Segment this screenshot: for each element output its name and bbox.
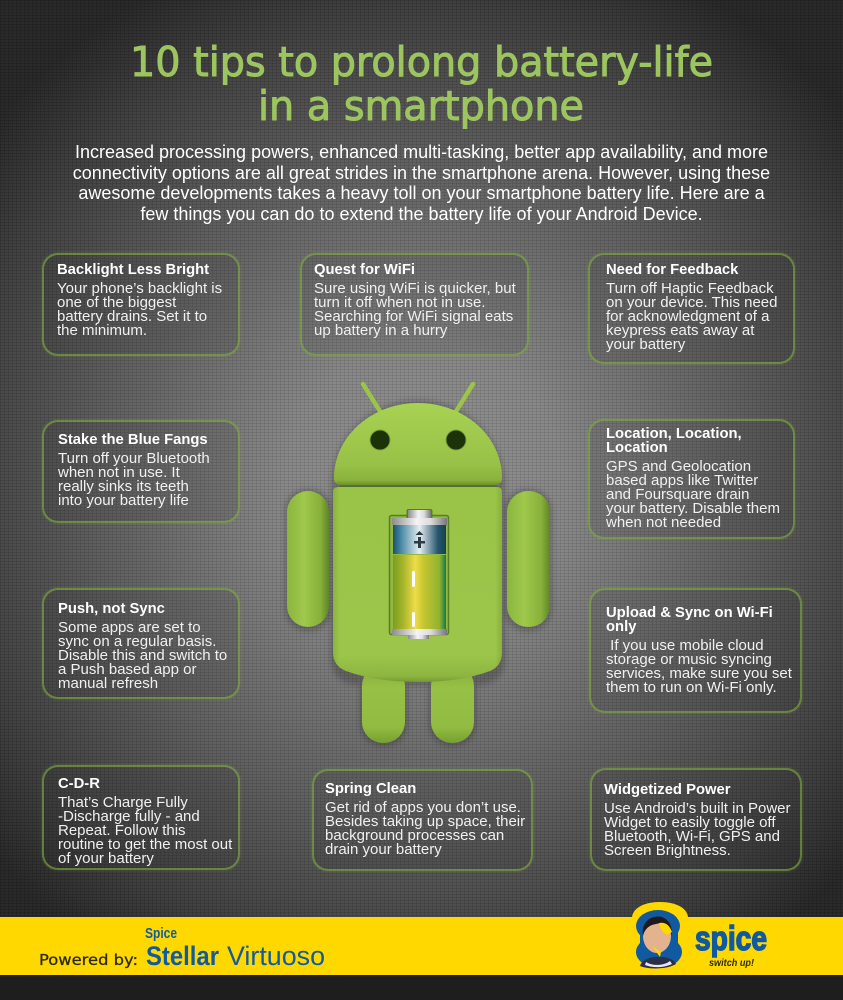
text: feedback: keypress eats away at: [606, 322, 754, 339]
heading: upload: only: [606, 619, 636, 635]
text: feedback: for acknowledgment of a: [606, 308, 769, 325]
battery: [390, 509, 448, 639]
heading: location: Location: [606, 440, 668, 456]
text: bluetooth: Turn off your Bluetooth: [58, 450, 210, 467]
text: widget: Screen Brightness.: [604, 842, 731, 859]
torso: [333, 487, 502, 682]
text: push: Some apps are set to: [58, 619, 201, 636]
text: wifi: [314, 280, 516, 339]
heading: bluetooth: Stake the Blue Fangs: [58, 432, 208, 448]
text: widget: [604, 800, 790, 859]
text: location: GPS and Geolocation: [606, 458, 751, 475]
heading: upload: [606, 605, 773, 635]
panel: location tip: [588, 419, 795, 539]
panel: upload tip: [589, 588, 802, 713]
text: backlight: the minimum.: [57, 322, 147, 339]
arms: [287, 491, 550, 627]
text: charge: Repeat. Follow this: [58, 822, 186, 839]
text: wifi: Sure using WiFi is quicker, but: [314, 280, 516, 297]
spice logo text: spice: [695, 920, 767, 958]
text: feedback: [606, 280, 778, 353]
panel: push tip: [42, 588, 240, 699]
text: backlight: Your phone’s backlight is: [57, 280, 222, 297]
legs: [362, 665, 474, 743]
panel: widget tip: [590, 768, 802, 871]
title: [130, 38, 713, 130]
panel: charge tip: [42, 765, 240, 870]
heading: push: Push, not Sync: [58, 601, 165, 617]
heading: spring clean: Spring Clean: [325, 781, 416, 797]
text: spring clean: Besides taking up space, their: [325, 813, 525, 830]
android robot illustration: [285, 384, 552, 746]
heading: location: Location, Location,: [606, 426, 742, 442]
text: widget: Widget to easily toggle off: [604, 814, 776, 831]
title: in a smartphone: [258, 82, 584, 130]
text: spring clean: drain your battery: [325, 841, 442, 858]
text: spring clean: [325, 799, 525, 858]
text: wifi: up battery in a hurry: [314, 322, 447, 339]
text: charge: -Discharge fully - and: [58, 808, 200, 825]
text: location: based apps like Twitter: [606, 472, 758, 489]
text: location: when not needed: [606, 514, 721, 531]
text: push: Disable this and switch to: [58, 647, 227, 664]
text: upload: [606, 637, 792, 696]
text: location: [606, 458, 780, 531]
text: widget: Bluetooth, Wi-Fi, GPS and: [604, 828, 780, 845]
heading: feedback: Need for Feedback: [606, 262, 738, 278]
text: charge: [58, 794, 232, 867]
text: wifi: turn it off when not in use.: [314, 294, 486, 311]
text: push: sync on a regular basis.: [58, 633, 216, 650]
title: 10 tips to prolong battery-life: [130, 38, 713, 86]
footer band: [0, 902, 843, 1000]
text: bluetooth: really sinks its teeth: [58, 478, 189, 495]
text: bluetooth: into your battery life: [58, 492, 189, 509]
text: charge: of your battery: [58, 850, 154, 867]
text: spring clean: background processes can: [325, 827, 504, 844]
text: backlight: [57, 280, 222, 339]
text: feedback: your battery: [606, 336, 685, 353]
intro paragraph: few things you can do to extend the battery life of your Android Device.: [140, 204, 703, 224]
text: spring clean: Get rid of apps you don’t use.: [325, 799, 521, 816]
heading: backlight: Backlight Less Bright: [57, 262, 209, 278]
panel: feedback tip: [588, 253, 795, 364]
intro paragraph: Increased processing powers, enhanced multi-tasking, better app availability, and more: [75, 142, 768, 162]
heading: charge: C-D-R: [58, 776, 100, 792]
panel: wifi tip: [300, 253, 529, 356]
text: push: manual refresh: [58, 675, 158, 692]
text: charge: routine to get the most out: [58, 836, 232, 853]
head: [334, 403, 502, 485]
text: feedback: Turn off Haptic Feedback: [606, 280, 774, 297]
text: backlight: battery drains. Set it to: [57, 308, 207, 325]
heading: location: [606, 426, 742, 456]
text: location: your battery. Disable them: [606, 500, 780, 517]
text: bluetooth: when not in use. It: [58, 464, 180, 481]
text: wifi: Searching for WiFi signal eats: [314, 308, 513, 325]
heading: upload: Upload & Sync on Wi-Fi: [606, 605, 773, 621]
text: location: and Foursquare drain: [606, 486, 749, 503]
text: widget: Use Android’s built in Power: [604, 800, 790, 817]
heading: widget: Widgetized Power: [604, 782, 730, 798]
text: upload: storage or music syncing: [606, 651, 772, 668]
product name virtuoso: Virtuoso: [227, 941, 325, 971]
text: backlight: one of the biggest: [57, 294, 176, 311]
text: upload: If you use mobile cloud: [610, 637, 764, 654]
text: feedback: on your device. This need: [606, 294, 778, 311]
heading: wifi: Quest for WiFi: [314, 262, 415, 278]
text: upload: them to run on Wi-Fi only.: [606, 679, 777, 696]
text: charge: That’s Charge Fully: [58, 794, 188, 811]
spice logo mark: [632, 902, 688, 968]
powered by label: Powered by:: [39, 951, 138, 969]
intro paragraph: connectivity options are all great strides in the smartphone arena. However, using these: [73, 162, 770, 182]
intro paragraph: awesome developments takes a heavy toll on your smartphone battery life. Here are a: [78, 183, 765, 203]
panel: bluetooth tip: [42, 420, 240, 523]
antennas: [363, 384, 473, 413]
text: push: a Push based app or: [58, 661, 196, 678]
tagline: switch up!: [709, 957, 754, 969]
intro paragraph: [73, 142, 770, 224]
product name stellar: Stellar: [146, 941, 219, 971]
text: bluetooth: [58, 450, 210, 509]
panel: backlight tip: [42, 253, 240, 356]
product name small: Spice: [145, 925, 177, 942]
text: push: [58, 619, 227, 692]
eyes: [370, 430, 466, 450]
panel: spring clean tip: [312, 769, 533, 871]
text: upload: services, make sure you set: [606, 665, 792, 682]
